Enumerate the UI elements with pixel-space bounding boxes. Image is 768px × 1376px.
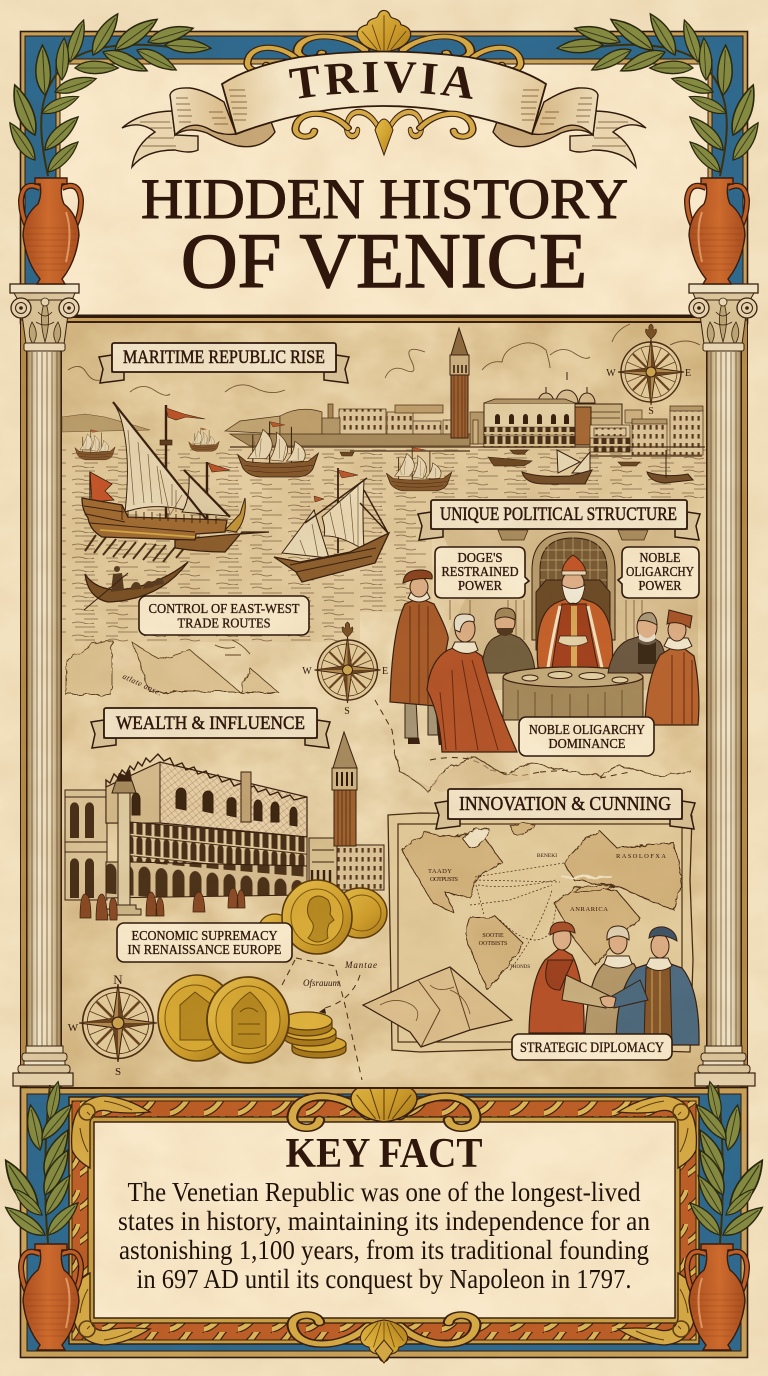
building: palace loggia (130, 822, 307, 866)
ornament: gold flourish under ribbon (295, 112, 473, 155)
table (503, 667, 643, 722)
banner: Innovation and Cunning: INNOVATION & CUNNING (459, 793, 671, 815)
callout: strategic diplomacy: STRATEGIC DIPLOMACY (520, 1040, 664, 1056)
callout: Doge's restrained power: DOGE'S (458, 550, 502, 565)
ornament: top palmette and scrolls (292, 1067, 476, 1128)
water: lagoon (62, 444, 706, 642)
compass: bottom left: W (68, 1022, 79, 1034)
map: coastline sketch left: atlate anse. (121, 672, 163, 698)
clouds (68, 324, 700, 395)
continents (402, 823, 682, 990)
crowd of figures (80, 888, 245, 920)
callout: trade routes (139, 596, 309, 635)
buildings west of the tower (225, 404, 484, 446)
far shore left (62, 414, 150, 432)
coins: top cluster (259, 880, 387, 954)
heading: TRIVIA: TRIVIA (288, 62, 472, 99)
compass: top right: W (606, 368, 616, 379)
coins: bottom cluster (158, 975, 346, 1063)
ribbon tail right (570, 111, 646, 167)
compass: middle: W (302, 666, 312, 677)
callout: noble oligarchy power: OLIGARCHY (626, 564, 694, 579)
ornament: corner scrolls (72, 1096, 696, 1345)
heading: Hidden History: HIDDEN HISTORY (141, 168, 628, 231)
map labels (428, 853, 666, 970)
map: coastline sketch left (66, 640, 278, 698)
compass: bottom left (68, 972, 157, 1078)
compass: middle: S (344, 706, 350, 717)
banner: Trivia ribbon (122, 52, 646, 167)
ship: cog with lateen sails (274, 468, 389, 582)
compass: middle: E (382, 666, 388, 677)
compass: bottom left: S (115, 1066, 121, 1078)
banner: Wealth and Influence: WEALTH & INFLUENCE (116, 713, 305, 734)
figure: Doge (537, 555, 613, 668)
callout: Doge's restrained power (435, 547, 529, 598)
illustration: Doge's Palace (65, 732, 384, 920)
figure: standing councillor (390, 570, 448, 744)
ribbon main band (222, 52, 546, 134)
ship: large galley (82, 402, 269, 562)
building: campanile (332, 732, 357, 846)
text block: key fact body: in 697 AD until its conquest by Napoleon in 1797. (136, 1263, 632, 1294)
vase: bottom left (21, 1244, 81, 1350)
map labels: SOOTIE (482, 933, 504, 939)
text block: key fact body (118, 1176, 650, 1294)
route sketch with labels: Ofsrauum (303, 978, 340, 988)
vase: bottom right (687, 1244, 747, 1350)
building: palace arcade (106, 862, 307, 898)
olive branch: top left (4, 10, 211, 176)
building: right wing (309, 838, 384, 893)
skyline: Venice waterfront (62, 328, 705, 456)
trade routes (470, 863, 564, 970)
banner: Innovation and Cunning (435, 789, 695, 829)
figure: seated right noble (645, 610, 699, 725)
column of Saint Mark (107, 769, 141, 915)
callout: Doge's restrained power: POWER (458, 578, 502, 593)
banner: Wealth and Influence (91, 708, 330, 748)
ships: background fleet (75, 422, 693, 491)
figure: diplomat in red (529, 922, 584, 1033)
buildings east of the palace (590, 406, 703, 455)
map labels: ANRARICA (570, 906, 608, 913)
callout: trade routes: CONTROL OF EAST-WEST (148, 602, 300, 617)
olive branch: top right (557, 10, 764, 176)
map labels: TAADY (428, 868, 452, 875)
compass: top right: S (648, 406, 654, 417)
banner: Unique Political Structure (418, 500, 700, 540)
map labels: THONDS (510, 965, 530, 970)
panel: header frame with blue border (20, 32, 748, 324)
callout: noble oligarchy dominance: DOMINANCE (548, 737, 626, 752)
ribbon folds (170, 88, 598, 147)
map labels: OOTBISTS (479, 941, 507, 947)
ornament: bottom palmette and scrolls (292, 1315, 476, 1363)
banner: Maritime Republic Rise (99, 343, 349, 383)
panel: key fact frame (20, 1067, 748, 1363)
figure: seated elder left (427, 614, 517, 752)
column: left (10, 284, 79, 1086)
route sketch with labels: Mantae (344, 960, 377, 970)
callout: economic supremacy: ECONOMIC SUPREMACY (132, 929, 278, 944)
callout: economic supremacy (117, 923, 292, 962)
compass: bottom left: N (113, 972, 123, 987)
heading: Key Fact: KEY FACT (286, 1131, 482, 1177)
vase: top left (21, 178, 81, 284)
building: palace upper wall (106, 754, 307, 837)
compass: middle (302, 622, 388, 717)
banner: Unique Political Structure: UNIQUE POLITICAL STRUCTURE (440, 504, 677, 525)
callout: noble oligarchy power: NOBLE (640, 550, 680, 565)
callout: trade routes: TRADE ROUTES (178, 616, 270, 632)
map: coastline route sketch (375, 700, 690, 792)
figure: diplomat in beige (585, 926, 645, 1035)
figure: seated second councillor (482, 608, 535, 673)
olive branch: bottom right (686, 1080, 768, 1243)
text block: key fact body: The Venetian Republic was one of the longest-lived (128, 1176, 641, 1207)
campanile tower (450, 328, 469, 438)
compass: top right: E (685, 368, 691, 379)
map: trade route chart (388, 813, 693, 1052)
text block: key fact body: astonishing 1,100 years, from its traditional founding (119, 1234, 649, 1265)
map labels: OOTPUSTS (430, 876, 458, 883)
figure: diplomat in blue (562, 927, 699, 1045)
ship: gondola (84, 562, 188, 610)
callout: noble oligarchy power (618, 547, 699, 598)
compass: top right (606, 324, 691, 417)
callout: strategic diplomacy (512, 1034, 672, 1060)
callout: noble oligarchy dominance: NOBLE OLIGARCHY (529, 723, 645, 738)
building: left library (65, 790, 107, 900)
council hall backdrop (420, 530, 698, 690)
text block: key fact body: states in history, maintaining its independence for an (118, 1205, 650, 1236)
illustration: council of Venice (390, 530, 699, 752)
panel: central illustrated map (61, 322, 707, 1088)
heading: of Venice: OF VENICE (181, 217, 587, 304)
callout: noble oligarchy dominance (519, 717, 654, 756)
domes and Doge's palace (484, 372, 622, 447)
column: right (689, 284, 758, 1086)
map labels: RASOLOFXA (616, 853, 666, 860)
ornament: top gold crest (247, 10, 521, 71)
folded paper map (363, 967, 512, 1047)
figure: seated right councillor (608, 613, 666, 673)
map labels: BENEKI (537, 853, 557, 859)
callout: noble oligarchy power: POWER (638, 578, 682, 593)
callout: Doge's restrained power: RESTRAINED (442, 564, 519, 579)
panel: side frame strips (20, 320, 748, 1088)
callout: economic supremacy: IN RENAISSANCE EUROPE (128, 943, 282, 958)
route sketch with labels (282, 958, 377, 1080)
vase: top right (687, 178, 747, 284)
olive branch: bottom left (0, 1080, 82, 1243)
ribbon tail left (122, 111, 198, 167)
banner: Maritime Republic Rise: MARITIME REPUBLIC RISE (123, 347, 325, 368)
